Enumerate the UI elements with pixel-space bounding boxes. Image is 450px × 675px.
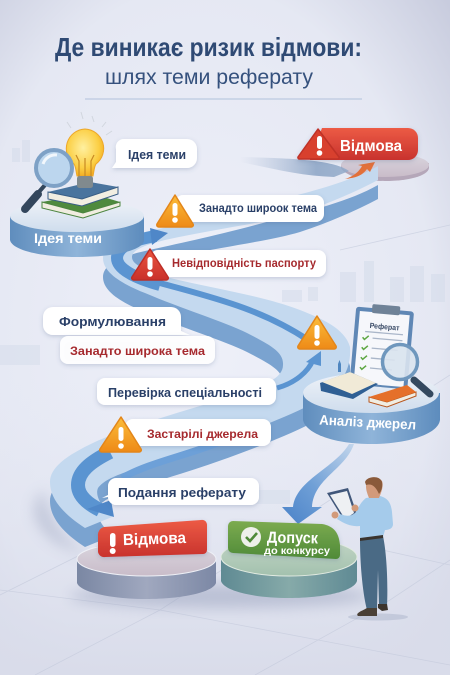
icon: open book	[320, 360, 378, 399]
icon: light bulb	[66, 112, 112, 188]
callout: topic idea: Ідея теми	[128, 148, 186, 162]
title	[55, 32, 362, 89]
icon: red warning	[132, 249, 168, 280]
icon: clipboard report	[349, 303, 414, 389]
callout: outdated sources	[125, 419, 271, 446]
shirt	[337, 496, 393, 540]
callout: too broad topic, second	[60, 336, 215, 364]
badge: admission: Допуск	[267, 530, 319, 547]
callout: outdated sources: Застарілі джерела	[147, 427, 258, 441]
badge: admission	[228, 521, 340, 559]
platform: admission	[221, 538, 357, 598]
callout: specialty check: Перевірка спеціальності	[108, 386, 262, 400]
platform: top right failure	[240, 153, 429, 181]
platform: failure	[77, 542, 216, 599]
label: topic idea platform: Ідея теми	[34, 230, 102, 246]
document	[327, 488, 357, 522]
callout: submission	[102, 478, 259, 505]
title: Де виникає ризик відмови:	[55, 32, 362, 62]
shadow: platforms	[70, 584, 370, 608]
figure: man reading document	[327, 477, 408, 620]
icon: orange warning on bend	[298, 316, 336, 349]
callout: specialty check	[97, 378, 276, 405]
badge: failure	[98, 520, 207, 557]
icon: clipboard report: Реферат	[369, 321, 400, 332]
callout: submission: Подання реферату	[118, 485, 247, 500]
icon: books	[42, 182, 120, 218]
badge: admission: до конкурсу	[264, 546, 330, 557]
platform: source analysis	[303, 373, 440, 444]
icon: orange warning, sources	[100, 417, 141, 452]
icon: magnifier on report	[382, 344, 430, 394]
arrow: orange to failure	[345, 162, 375, 179]
shadow: road	[34, 490, 95, 560]
head	[366, 478, 383, 498]
icon: orange book	[369, 385, 416, 407]
icon: magnifier	[25, 150, 72, 209]
arrow: sources to admission	[282, 444, 354, 524]
legs	[360, 536, 387, 610]
callout: too broad topic	[175, 195, 324, 222]
callout: topic idea	[112, 139, 197, 168]
callout: wording: Формулювання	[59, 314, 166, 329]
arrow head: road to topic warning	[150, 228, 168, 245]
road stripes	[78, 236, 313, 510]
icon: orange warning	[157, 195, 193, 227]
hands	[332, 512, 338, 518]
arrow head: road to submission	[87, 500, 114, 517]
badge: top failure: Відмова	[340, 138, 402, 155]
label: source analysis: Аналіз джерел	[319, 412, 417, 433]
callout: wording	[43, 307, 190, 335]
subtitle: шлях теми реферату	[105, 66, 314, 89]
belt	[360, 535, 383, 541]
platform: topic idea	[10, 200, 144, 257]
arrow head: road to sources	[306, 351, 321, 366]
winding road	[50, 166, 378, 547]
callout: too broad topic: Занадто широок тема	[199, 201, 317, 215]
callout: too broad topic, second: Занадто широка тема	[70, 344, 205, 358]
badge: top failure	[298, 128, 418, 160]
callout: passport mismatch: Невідповідність паспорту	[172, 256, 316, 270]
callout: passport mismatch	[150, 250, 326, 277]
badge: failure: Відмова	[123, 530, 186, 549]
shoes	[357, 608, 377, 616]
